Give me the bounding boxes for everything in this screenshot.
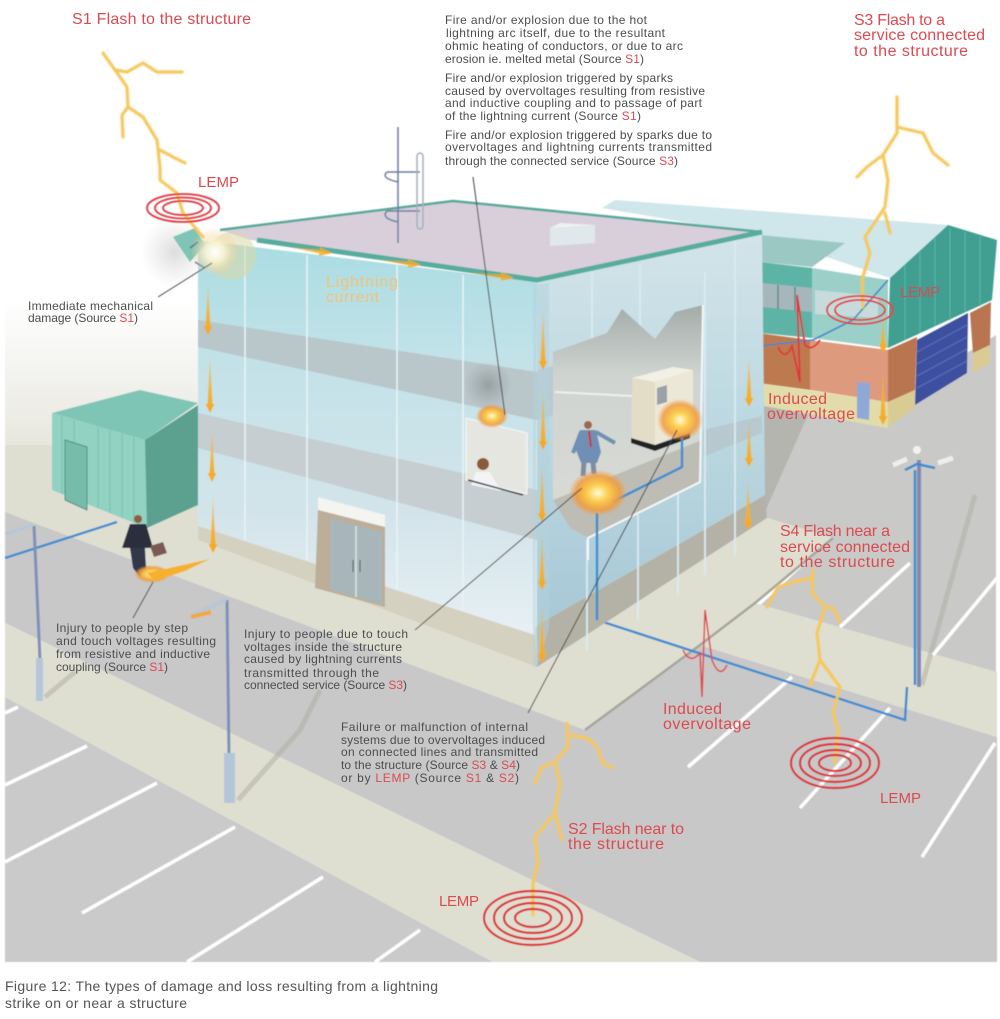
- annotation: immediate mechanical damage: Immediate mechanical: [28, 299, 153, 313]
- window with woman: [466, 418, 527, 495]
- annotation: failure of internal systems: or by LEMP (Source S1 & S2): [341, 771, 519, 785]
- annotation: step and touch voltages: [56, 621, 216, 674]
- label: LEMP at S2: LEMP: [439, 893, 479, 910]
- label: lightning current: current: [326, 289, 380, 306]
- floor bands on left wall: [198, 245, 537, 610]
- label: induced overvoltage at warehouse: overvoltage: [767, 406, 855, 423]
- annotation: fire and explosion causes: through the connected service (Source S3): [445, 154, 678, 168]
- annotation: fire and explosion causes: lightning arc itself, due to the resultant: [446, 26, 666, 40]
- annotation: touch voltages inside the structure: connected service (Source S3): [244, 678, 407, 692]
- LEMP rings at S1: [147, 194, 219, 222]
- induced overvoltage waveform on ground cable: [683, 610, 727, 697]
- label: S1 flash: S1 Flash to the structure: [72, 11, 251, 28]
- lightning bolt S4: [767, 570, 840, 763]
- label: S4 flash: service connected: [780, 539, 910, 556]
- label: S2 flash: S2 Flash near to: [568, 821, 684, 838]
- internal equipment cabinet: [631, 367, 693, 451]
- figure caption: Figure 12: The types of damage and loss resulting from a lightning: [5, 978, 438, 994]
- annotation: fire and explosion causes: Fire and/or explosion due to the hot: [445, 13, 648, 27]
- label: S4 flash: to the structure: [780, 554, 895, 571]
- annotation: failure of internal systems: on connected lines and transmitted: [341, 745, 538, 759]
- floodlight pole: [893, 446, 953, 687]
- man inside room: [573, 421, 615, 476]
- label: S3 flash: to the structure: [854, 43, 968, 60]
- annotation: fire and explosion causes: and inductive coupling and to passage of part: [445, 96, 703, 110]
- lightning bolt S1: [103, 53, 203, 237]
- label: S3 flash: [854, 12, 985, 60]
- man walking outside with briefcase: [122, 515, 210, 583]
- annotation: fire and explosion causes: of the lightning current (Source S1): [445, 109, 641, 123]
- annotation: failure of internal systems: systems due to overvoltages induced: [341, 733, 545, 747]
- lamp post left: [5, 525, 43, 701]
- roof edge current arrows: [287, 247, 514, 281]
- fire at equipment: [657, 399, 703, 441]
- annotation: failure of internal systems: to the structure (Source S3 & S4): [341, 758, 520, 772]
- warehouse connected service building: [602, 200, 997, 428]
- cutaway room: [553, 305, 703, 560]
- annotation: step and touch voltages: and touch voltages resulting: [56, 634, 216, 648]
- label: induced overvoltage on ground: Induced: [663, 701, 722, 718]
- left glass wall: [198, 240, 537, 635]
- label: S4 flash: S4 Flash near a: [780, 523, 890, 540]
- annotation: touch voltages inside the structure: caused by lightning currents: [244, 652, 402, 666]
- label: S3 flash: S3 Flash to a: [854, 12, 945, 29]
- annotation: touch voltages inside the structure: voltages inside the structure: [244, 640, 402, 654]
- annotation: touch voltages inside the structure: transmitted through the: [244, 666, 379, 680]
- annotation: touch voltages inside the structure: Injury to people due to touch: [244, 627, 408, 641]
- LEMP rings at S4: [791, 738, 879, 788]
- label: induced overvoltage at warehouse: Induced: [768, 391, 827, 408]
- internal cable in room: [597, 438, 682, 620]
- annotation: touch voltages inside the structure: [244, 627, 408, 692]
- LEMP rings at S2: [484, 891, 582, 945]
- annotation: immediate mechanical damage: damage (Source S1): [28, 311, 138, 325]
- annotation: fire and explosion causes: Fire and/or explosion triggered by sparks: [445, 71, 673, 85]
- rooftop antenna mast: [385, 127, 423, 243]
- label: LEMP at S1: LEMP: [198, 174, 239, 191]
- lightning current arrows: [204, 283, 888, 663]
- damaged roof corner: [141, 216, 256, 288]
- fire on floor: [569, 470, 627, 516]
- small shed: [52, 390, 198, 528]
- LEMP rings at S3: [827, 296, 893, 324]
- smoke and fire at window: [464, 361, 512, 428]
- annotation: failure of internal systems: [341, 720, 545, 785]
- right wall plinth and mullions: [533, 240, 767, 667]
- label: S3 flash: service connected: [854, 27, 985, 44]
- lightning bolt S3: [857, 97, 948, 307]
- right glass wall: [537, 232, 765, 625]
- parking bay markings: [5, 563, 997, 962]
- annotation: step and touch voltages: from resistive and inductive: [56, 647, 210, 661]
- leader lines: [133, 177, 677, 713]
- annotation: fire and explosion causes: erosion ie. melted metal (Source S1): [445, 52, 644, 66]
- plinth: [198, 526, 537, 667]
- annotation: failure of internal systems: Failure or malfunction of internal: [341, 720, 528, 734]
- annotation: immediate mechanical damage: [28, 299, 153, 325]
- label: LEMP at S4: LEMP: [880, 790, 921, 807]
- annotation: step and touch voltages: Injury to people by step: [56, 621, 188, 635]
- label: S4 flash: [780, 523, 910, 571]
- entrance door: [315, 497, 385, 607]
- label: lightning current: [326, 274, 398, 306]
- annotation: fire and explosion causes: ohmic heating of conductors, or due to arc: [445, 39, 683, 53]
- label: S2 flash: the structure: [568, 836, 664, 853]
- label: induced overvoltage on ground: overvoltage: [663, 716, 751, 733]
- service cable: ground run to the building and floodlight: [5, 522, 907, 720]
- figure caption: strike on or near a structure: [5, 995, 187, 1011]
- main structure: [141, 127, 888, 667]
- annotation: fire and explosion causes: [445, 13, 712, 168]
- flat roof: [220, 200, 762, 280]
- ground: roads, pavements and car parks: [5, 300, 997, 962]
- lamp post centre: [191, 600, 235, 803]
- induced overvoltage waveform on warehouse: [778, 295, 820, 382]
- label: LEMP at S3: LEMP: [900, 284, 940, 301]
- annotation: step and touch voltages: coupling (Source S1): [56, 660, 168, 674]
- label: induced overvoltage at warehouse: [767, 391, 855, 423]
- label: S2 flash: [568, 821, 684, 853]
- annotation: fire and explosion causes: Fire and/or explosion triggered by sparks due to: [445, 128, 712, 142]
- lightning bolt S2: [533, 723, 613, 915]
- annotation: fire and explosion causes: caused by overvoltages resulting from resistive: [445, 84, 705, 98]
- label: lightning current: Lightning: [326, 274, 398, 291]
- label: induced overvoltage on ground: [663, 701, 751, 733]
- figure caption: [5, 978, 438, 1011]
- annotation: fire and explosion causes: overvoltages and lightning currents transmitted: [445, 140, 712, 154]
- rooftop unit: [550, 223, 595, 246]
